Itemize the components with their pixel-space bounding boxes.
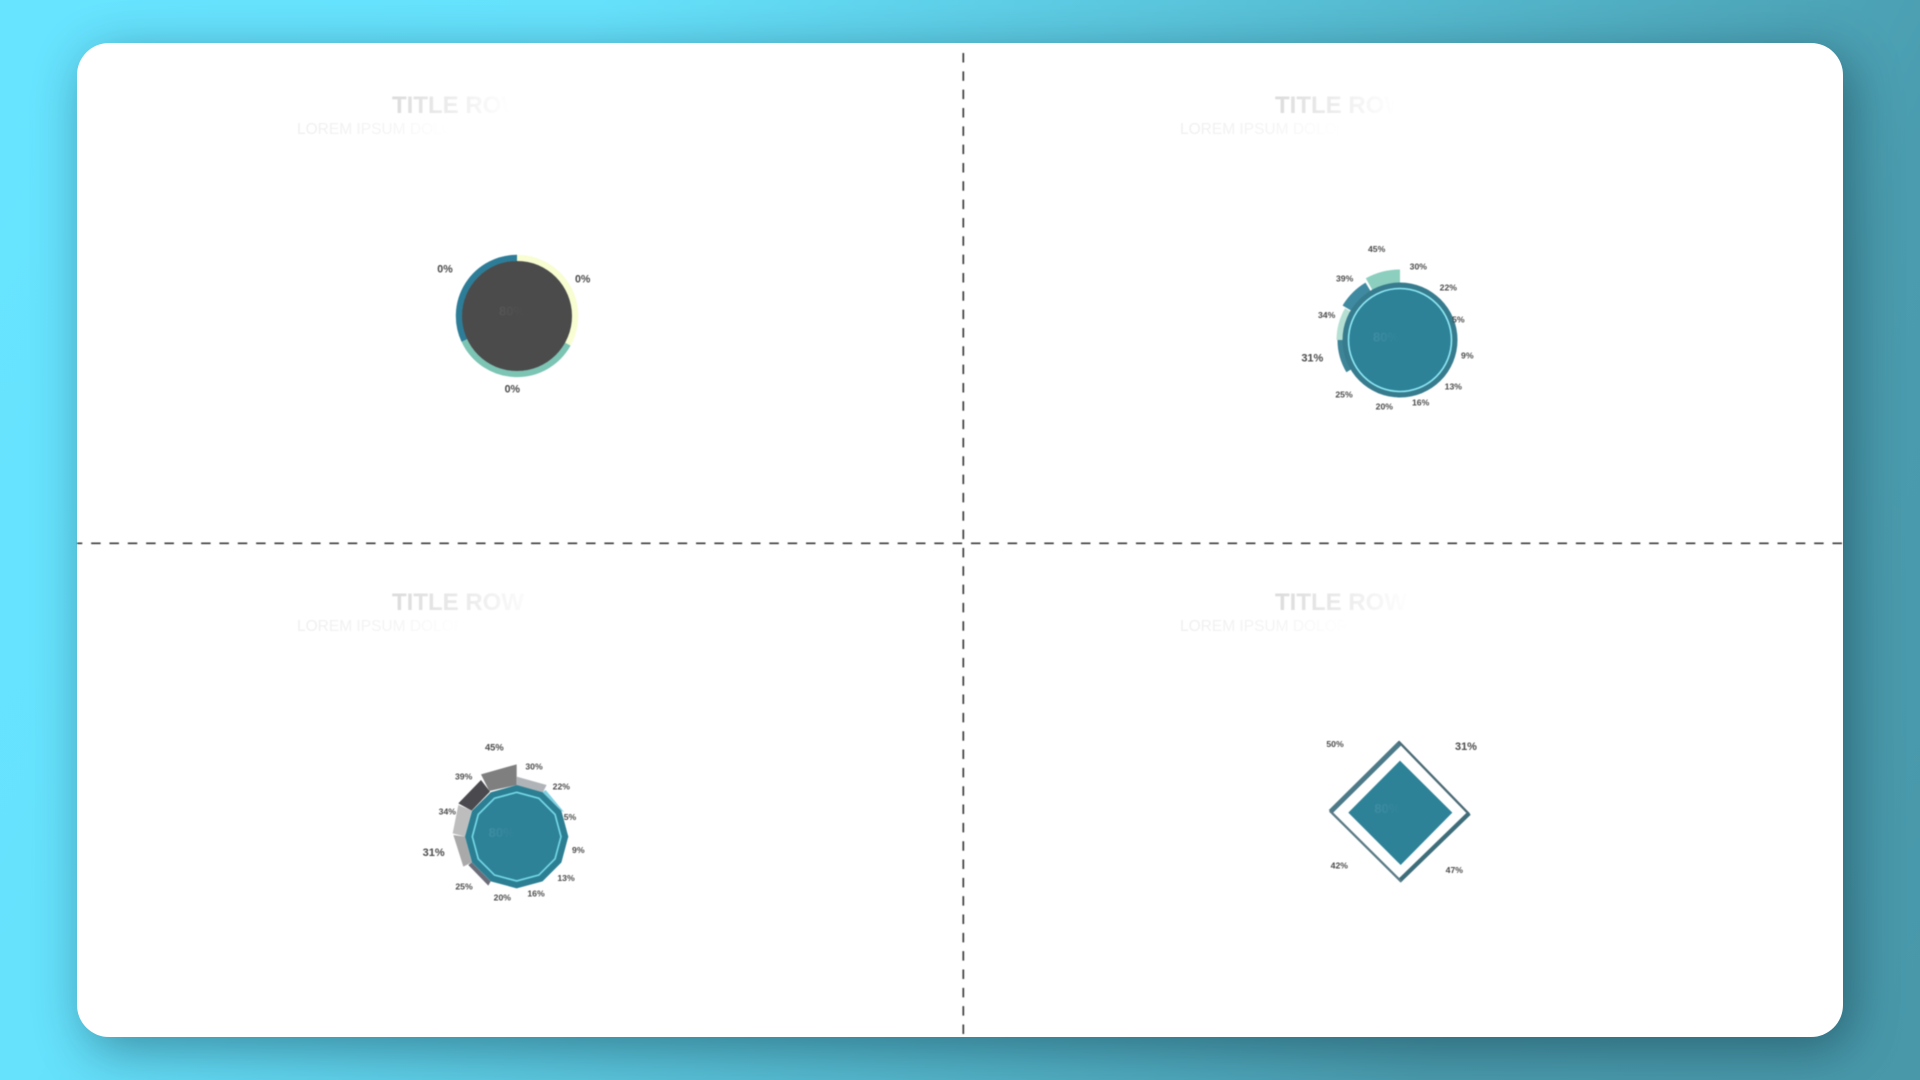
panel: bottom right diamond chart bbox=[1180, 589, 1477, 881]
subtitle: bottom right: LOREM IPSUM DOLOR bbox=[1180, 618, 1348, 635]
percentage labels: donut: 0% bbox=[575, 273, 591, 285]
percentage labels: diamond bbox=[1326, 739, 1477, 875]
percentage labels: polygon: 16% bbox=[527, 888, 545, 898]
percentage labels: donut: 0% bbox=[505, 383, 521, 395]
diamond centre label: 80% bbox=[1374, 801, 1401, 816]
percentage labels: diamond: 42% bbox=[1331, 861, 1348, 871]
percentage labels: polygon: 20% bbox=[494, 892, 511, 902]
percentage labels: polygon: 30% bbox=[525, 761, 543, 771]
diamond: outer frame bbox=[1331, 742, 1468, 881]
polygon centre label: 80% bbox=[489, 825, 515, 840]
title: top right: TITLE ROW bbox=[1275, 92, 1407, 119]
percentage labels: diamond: 47% bbox=[1446, 865, 1463, 875]
subtitle: bottom left: LOREM IPSUM DOLOR bbox=[297, 618, 465, 635]
panel: top right radial chart bbox=[1180, 92, 1474, 411]
percentage labels: polygon bbox=[423, 743, 585, 902]
percentage labels: polygon: 22% bbox=[553, 781, 570, 791]
polygon chart: dodecagon bbox=[465, 785, 568, 888]
percentage labels: diamond: 31% bbox=[1455, 741, 1477, 753]
percentage labels: radial: 31% bbox=[1301, 352, 1324, 364]
percentage labels: polygon: 25% bbox=[455, 882, 473, 892]
donut centre label: 80% bbox=[499, 304, 525, 318]
percentage labels: radial: 25% bbox=[1335, 389, 1353, 399]
diamond chart bbox=[1326, 739, 1477, 881]
percentage labels: polygon: 9% bbox=[572, 845, 585, 855]
panel: top left donut bbox=[297, 92, 591, 395]
percentage labels: donut: 0% bbox=[437, 263, 453, 275]
percentage labels: polygon: 34% bbox=[439, 807, 456, 817]
percentage labels: diamond: 50% bbox=[1326, 739, 1344, 749]
subtitle: top left: LOREM IPSUM DOLOR bbox=[297, 121, 465, 138]
percentage labels: donut bbox=[437, 263, 591, 395]
donut chart: segmented ring bbox=[459, 258, 575, 374]
percentage labels: radial: 22% bbox=[1440, 282, 1457, 292]
diamond: inner fill bbox=[1348, 761, 1452, 865]
percentage labels: polygon: 39% bbox=[455, 772, 473, 782]
percentage labels: polygon: 13% bbox=[557, 873, 575, 883]
percentage labels: polygon: 45% bbox=[485, 743, 504, 753]
percentage labels: radial: 45% bbox=[1368, 244, 1386, 254]
percentage labels: radial: 20% bbox=[1376, 401, 1393, 411]
title: bottom right: TITLE ROW bbox=[1275, 589, 1407, 616]
percentage labels: polygon: 31% bbox=[423, 847, 445, 859]
subtitle: top right: LOREM IPSUM DOLOR bbox=[1180, 121, 1348, 138]
title: bottom left: TITLE ROW bbox=[392, 589, 524, 616]
radial bar chart: disc bbox=[1342, 282, 1458, 398]
disc centre label: 80% bbox=[1373, 330, 1399, 344]
percentage labels: radial: 5% bbox=[1452, 314, 1465, 324]
percentage labels: radial: 16% bbox=[1412, 397, 1430, 407]
polygon chart bbox=[423, 743, 585, 902]
percentage labels: radial bbox=[1301, 244, 1474, 411]
polygon chart: grey segments bbox=[453, 764, 564, 886]
percentage labels: radial: 39% bbox=[1336, 273, 1354, 283]
percentage labels: radial: 34% bbox=[1318, 310, 1336, 320]
radial bar chart: segments bbox=[1340, 276, 1400, 370]
percentage labels: radial: 30% bbox=[1410, 262, 1427, 272]
title: top left: TITLE ROW bbox=[392, 92, 524, 119]
percentage labels: polygon: 5% bbox=[564, 812, 577, 822]
percentage labels: radial: 9% bbox=[1461, 351, 1474, 361]
panel: bottom left polygon chart bbox=[297, 589, 585, 902]
percentage labels: radial: 13% bbox=[1445, 381, 1462, 391]
